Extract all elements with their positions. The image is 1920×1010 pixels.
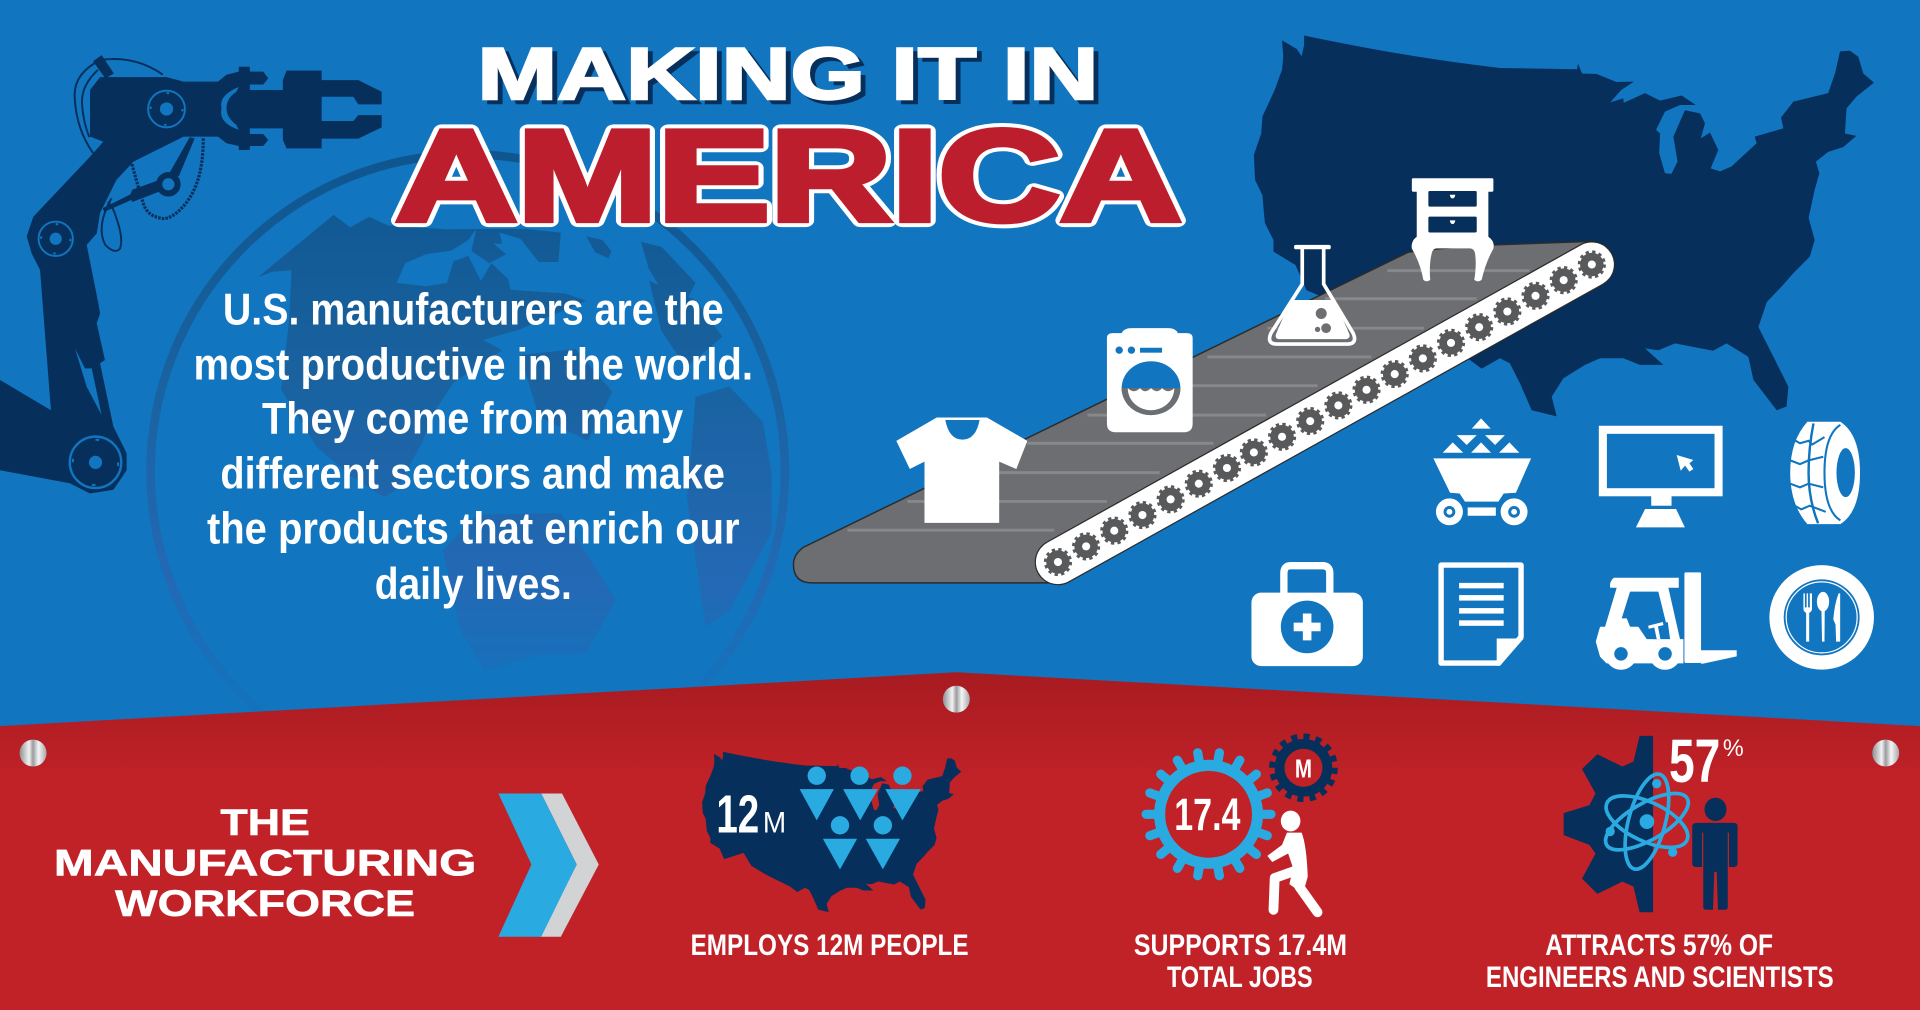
title <box>396 32 1182 248</box>
small us map <box>702 752 961 912</box>
stat: 12m people <box>691 752 969 962</box>
title line: america: AMERICA <box>396 103 1182 248</box>
icon: computer monitor <box>1603 430 1719 527</box>
icon: nightstand <box>1412 178 1494 281</box>
scientist figure <box>1692 798 1738 910</box>
label: TOTAL JOBS <box>1167 961 1313 994</box>
icon: plate and cutlery <box>1769 565 1874 670</box>
worker <box>1267 811 1318 912</box>
screws <box>20 686 1899 767</box>
57 figure: 57 <box>1669 727 1720 795</box>
icon: first aid kit <box>1251 566 1363 666</box>
panel: manufacturing workforce <box>0 672 1920 1010</box>
intro text: most productive in the world. <box>193 341 753 390</box>
globe watermark <box>151 154 785 789</box>
icon: t-shirt <box>896 418 1027 523</box>
intro text: the products that enrich our <box>207 505 740 554</box>
icon: document <box>1441 565 1524 666</box>
intro text: different sectors and make <box>220 450 725 499</box>
heading: the manufacturing workforce: MANUFACTURING <box>54 843 476 884</box>
robot arm <box>0 55 382 493</box>
stat: 57 percent <box>1486 727 1834 994</box>
icon: washing machine <box>1107 328 1193 432</box>
title line: making it in: MAKING IT IN <box>478 32 1098 115</box>
icon: forklift <box>1596 572 1737 670</box>
label: SUPPORTS 17.4M <box>1134 929 1347 962</box>
half gear <box>1564 736 1653 912</box>
stat: 17.4m jobs <box>1134 737 1347 994</box>
title line: america: AMERICA <box>396 103 1182 248</box>
people icons <box>800 767 921 869</box>
m letter: M <box>1295 756 1312 784</box>
icon: flask <box>1270 245 1355 344</box>
intro text: daily lives. <box>375 560 572 609</box>
12m figure: M <box>763 807 786 840</box>
heading: the manufacturing workforce: THE <box>220 802 310 843</box>
large gear <box>1146 753 1271 876</box>
label <box>1134 929 1347 994</box>
intro text <box>193 285 753 609</box>
conveyor belt <box>793 241 1605 583</box>
belt surface <box>793 241 1594 583</box>
heading: the manufacturing workforce: WORKFORCE <box>115 883 415 924</box>
atom <box>1597 770 1696 874</box>
icon: tire <box>1790 422 1860 524</box>
57 figure: % <box>1723 735 1744 762</box>
arrow: chevron <box>498 793 599 937</box>
belt edge with gears <box>1045 252 1605 575</box>
small gear <box>1273 737 1334 798</box>
12m figure: 12 <box>716 785 759 845</box>
map of the united states <box>1254 36 1874 416</box>
intro text: U.S. manufacturers are the <box>223 285 724 334</box>
label: ENGINEERS AND SCIENTISTS <box>1486 961 1834 994</box>
label <box>1486 929 1834 994</box>
label: ATTRACTS 57% OF <box>1545 929 1773 962</box>
intro text: They come from many <box>262 394 684 443</box>
heading: the manufacturing workforce <box>54 802 476 924</box>
icon: mine cart <box>1433 418 1531 525</box>
label: EMPLOYS 12M PEOPLE <box>691 929 969 962</box>
title line: making it in: MAKING IT IN <box>482 36 1103 119</box>
17.4 figure: 17.4 <box>1174 789 1240 840</box>
